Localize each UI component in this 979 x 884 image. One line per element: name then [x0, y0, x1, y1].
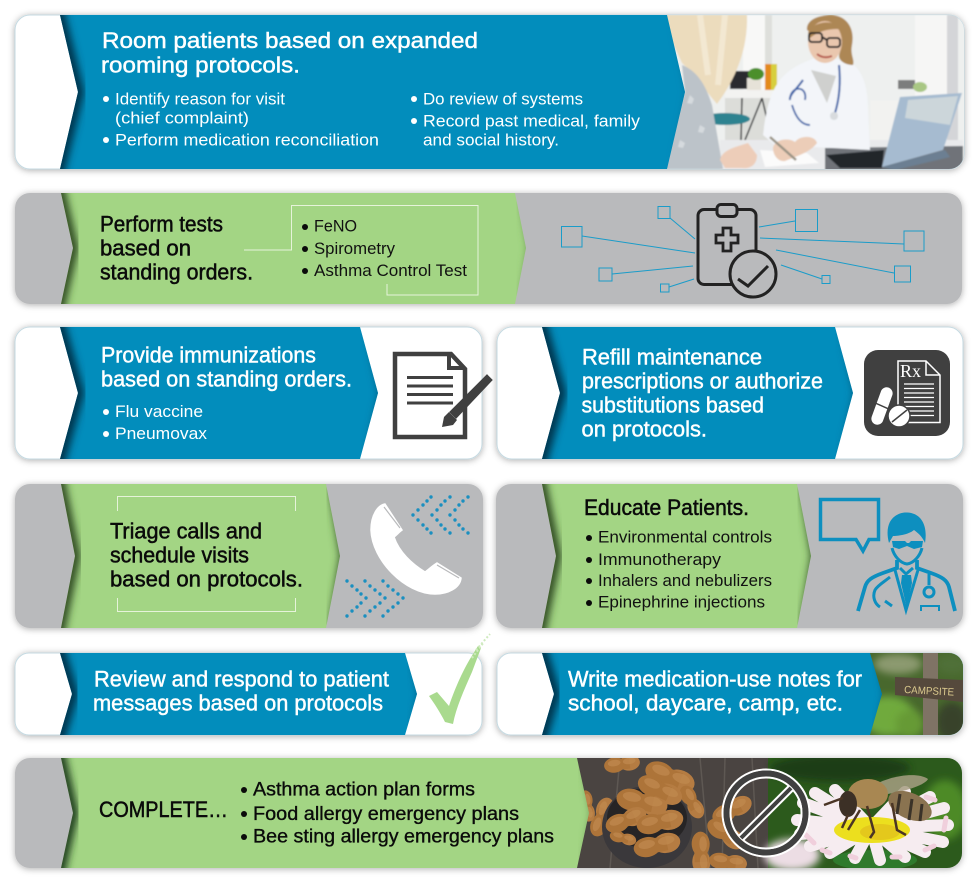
list: Asthma action plan forms: [253, 780, 475, 800]
list: Flu vaccine: [115, 402, 203, 421]
panel: perform tests: [11, 190, 966, 309]
photo: campsite sign: CAMPSITE: [904, 684, 954, 699]
list: [241, 780, 554, 848]
photo: doctor with patient: [660, 15, 970, 170]
heading: [100, 212, 253, 284]
list: [302, 216, 467, 280]
list: Immunotherapy: [598, 550, 722, 569]
list: Food allergy emergency plans: [253, 804, 519, 825]
icon: prescription: [864, 350, 950, 436]
list: Bee sting allergy emergency plans: [253, 826, 554, 848]
icon: telephone: [371, 504, 461, 594]
list: left: Perform medication reconciliation: [115, 130, 379, 150]
list: [586, 528, 772, 612]
list: right: Do review of systems: [423, 90, 583, 108]
heading: [110, 518, 303, 592]
text: [93, 666, 389, 716]
list: right: Record past medical, family: [423, 112, 641, 130]
heading: Perform tests: [100, 212, 223, 236]
text: Review and respond to patient: [94, 666, 389, 692]
heading: [101, 342, 352, 392]
list: Epinephrine injections: [598, 592, 765, 612]
heading: Provide immunizations: [101, 342, 316, 368]
text: messages based on protocols: [93, 690, 383, 716]
list: right: and social history.: [423, 130, 559, 150]
list: left: (chief complaint): [115, 108, 249, 128]
network of squares: [562, 206, 924, 292]
text: Write medication-use notes for: [568, 666, 862, 692]
heading: Room patients based on expanded: [102, 28, 478, 53]
heading: on protocols.: [582, 416, 707, 442]
heading: Educate Patients.: [584, 495, 749, 520]
heading: COMPLETE…: [99, 797, 228, 822]
green chevron: [542, 484, 811, 628]
icon: prohibition sign: [722, 770, 810, 856]
list: Environmental controls: [598, 528, 772, 546]
text: [568, 666, 862, 716]
panel: educate patients: [492, 481, 967, 633]
heading: based on standing orders.: [101, 366, 352, 392]
list: left: [103, 90, 379, 150]
blue chevron: [60, 327, 378, 459]
green chevron: [61, 484, 340, 628]
dots: outgoing chevrons: [345, 579, 405, 618]
heading: based on protocols.: [110, 566, 303, 592]
desk items: [760, 150, 819, 167]
icon: prescription: Rx: [900, 361, 921, 381]
text: school, daycare, camp, etc.: [568, 690, 843, 716]
list: FeNO: [314, 216, 357, 236]
doctor: [763, 58, 870, 150]
green chevron: [61, 193, 526, 304]
heading: schedule visits: [110, 542, 249, 568]
blue chevron: [60, 653, 417, 735]
icon: document and pen: [395, 354, 490, 437]
list: Spirometry: [314, 239, 395, 258]
patient: [660, 15, 747, 104]
blue chevron: [542, 653, 882, 735]
list: Pneumovax: [115, 424, 208, 443]
panel: medication notes: [492, 650, 968, 740]
heading: [582, 344, 823, 442]
heading: prescriptions or authorize: [582, 368, 823, 394]
photo: campsite sign: [870, 653, 963, 735]
heading: substitutions based: [582, 392, 764, 418]
heading: standing orders.: [100, 260, 253, 284]
icon: speech bubble: [820, 500, 878, 551]
icon: clipboard with check: [698, 204, 776, 297]
icon: doctor: [858, 512, 955, 611]
list: [103, 402, 208, 443]
panel: refill prescriptions: [492, 324, 968, 464]
panel: complete forms: [11, 755, 966, 873]
heading: based on: [100, 236, 191, 260]
panel: review messages: [10, 634, 491, 740]
photo: peanuts: [577, 758, 962, 868]
panel: immunizations: [10, 324, 493, 464]
panel: triage calls: [11, 481, 487, 633]
list: Inhalers and nebulizers: [598, 571, 772, 590]
dots: incoming chevrons: [411, 495, 470, 535]
photo: bee on flower: [764, 754, 968, 871]
list: left: Identify reason for visit: [115, 90, 285, 108]
heading: Triage calls and: [110, 518, 262, 544]
heading: [101, 28, 478, 78]
green chevron: [61, 758, 589, 868]
blue chevron: [60, 15, 685, 169]
icon: check mark: [429, 634, 490, 724]
heading: Refill maintenance: [582, 344, 762, 370]
heading: rooming protocols.: [101, 52, 300, 78]
list: right: [411, 90, 641, 150]
list: Asthma Control Test: [314, 261, 467, 280]
blue chevron: [542, 327, 853, 459]
panel: room patients: [10, 12, 968, 174]
